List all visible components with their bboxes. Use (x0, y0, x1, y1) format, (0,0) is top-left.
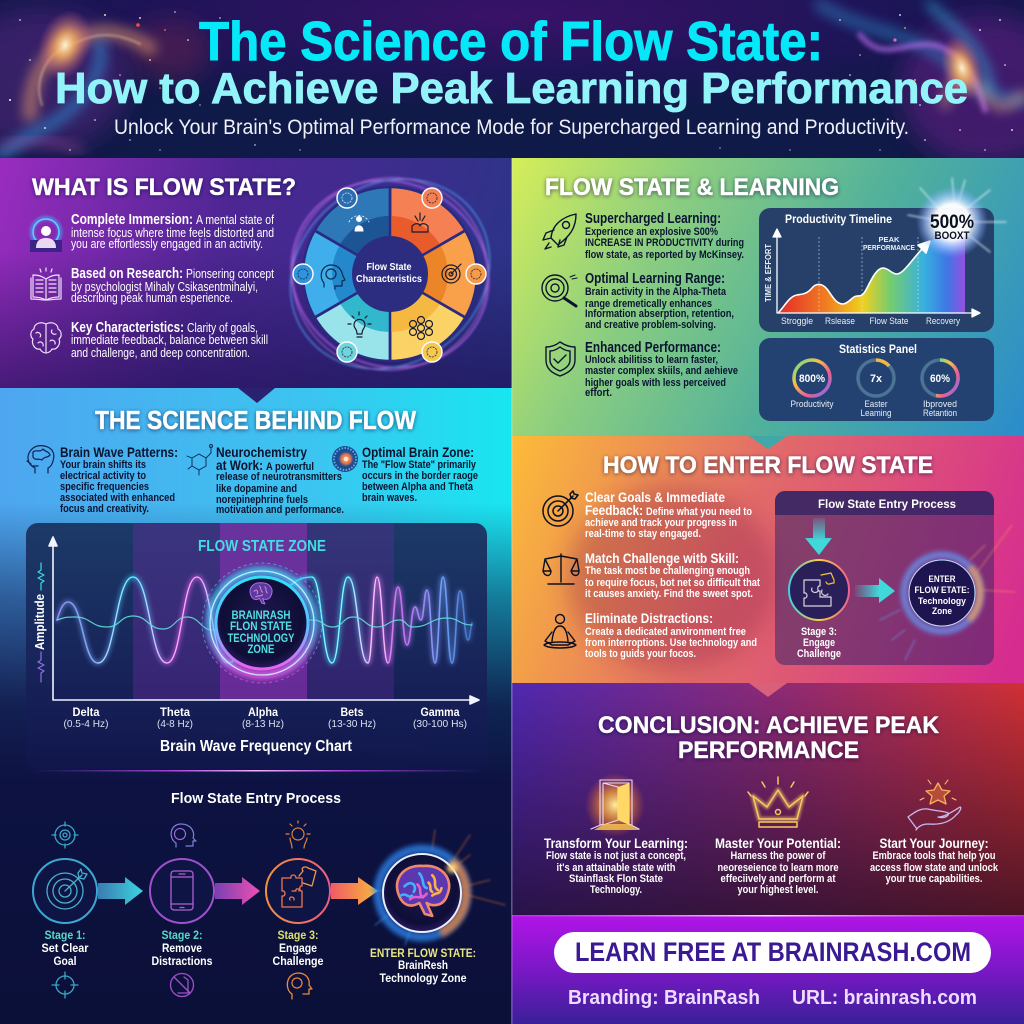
icon: glowing door (585, 773, 645, 837)
icon: scales (543, 554, 579, 584)
column: transform your learning: Technology. (590, 884, 642, 896)
text: optimal brain zone: The "Flow State" primarily (362, 459, 477, 471)
process title: Flow State Entry Process (171, 790, 341, 807)
text: clear goals (543, 489, 752, 540)
stat: improved retention: Ibproved (923, 399, 957, 410)
arrow: down (805, 518, 832, 555)
icon: molecule (187, 444, 212, 475)
stage 2: Remove (162, 941, 202, 955)
text: optimal learning range: Information abserption, retention, (585, 308, 734, 320)
column: start your journey: access flow state and unlock (870, 862, 999, 874)
orb label: ZONE (248, 642, 274, 656)
text: clear goals: achieve and track your progress in (585, 517, 737, 529)
icon: thinking head (286, 821, 310, 848)
chart: productivity timeline: PEAK (878, 235, 900, 244)
stat: productivity: Productivity (790, 399, 834, 410)
panel: conclusion (512, 683, 1024, 916)
text: eliminate distractions: tools to guids your focos. (585, 648, 696, 660)
left galaxy (0, 2, 210, 155)
text: complete immersion: you are effortlessly engaged in an activity. (71, 237, 263, 251)
arrow: stage 2 to 3 (215, 877, 260, 905)
chart: productivity timeline: Flow State (870, 316, 908, 327)
text: match challenge: The task most be challenging enough (585, 565, 750, 577)
stage 3: Engage (279, 941, 317, 955)
text: clear goals: Clear Goals & Immediate (585, 489, 725, 505)
icon: rocket (543, 214, 576, 249)
text: optimal brain zone: occurs in the border raoge (362, 470, 478, 482)
text: clear goals: Define what you need to (646, 506, 752, 518)
text: supercharged learning: Experience an explosive S00% (585, 226, 718, 238)
text: optimal learning range (542, 271, 734, 331)
stage 3 label (797, 626, 841, 660)
notch arrow (749, 436, 787, 449)
icon: crown (748, 777, 808, 827)
heading (598, 712, 940, 764)
text: based on research: by psychologist Mihaly Csikasentmihalyi, (71, 280, 258, 294)
column: master your potential: Harness the power of (730, 850, 826, 862)
title: How to Achieve Peak Learning Performance (55, 64, 968, 113)
process: flow state entry (33, 790, 505, 999)
starfield (9, 11, 1013, 151)
text: neurochemistry at work: motivation and performance. (216, 504, 344, 516)
icon: head orange (287, 973, 312, 999)
icon: small target (52, 822, 78, 848)
trend arrow (779, 241, 930, 312)
text: enhanced performance (546, 340, 738, 399)
text: optimal brain zone: brain waves. (362, 492, 417, 504)
rainbow area (779, 222, 965, 313)
stat: improved retention: Retantion (923, 408, 957, 419)
flow state orb: BrainResh (398, 958, 448, 972)
heading: PERFORMANCE (678, 737, 859, 764)
column: master your potential: neoreseience to learn more (718, 862, 838, 874)
stat: productivity: 800% (799, 373, 825, 385)
frequency bands (133, 523, 394, 700)
text: key characteristics: Clarity of goals, (187, 321, 258, 335)
column: transform your learning: it's an attainable state with (556, 862, 676, 874)
icon: brain outline (31, 323, 61, 353)
frequency labels: Gamma (420, 705, 460, 719)
stage 3 circle (789, 560, 849, 620)
chart: productivity timeline: PERFORMANCE (863, 243, 915, 252)
heading: HOW TO ENTER FLOW STATE (603, 452, 933, 479)
stage 3: Challenge (272, 954, 324, 968)
panel: statistics (759, 338, 994, 421)
flow state orb: ENTER FLOW STATE: (370, 946, 476, 960)
text: brain wave patterns: Your brain shifts its (60, 459, 146, 471)
frequency labels: Bets (340, 705, 364, 719)
icon: colorful brain (397, 866, 449, 916)
text: match challenge (543, 550, 760, 600)
text: complete immersion: Complete Immersion: (71, 212, 193, 228)
heading: FLOW STATE & LEARNING (545, 174, 839, 201)
text: based on research: Pionsering concept (186, 267, 274, 281)
stage 3: Stage 3: (278, 928, 318, 942)
frequency labels: (8-13 Hz) (242, 718, 284, 730)
text: key characteristics: immediate feedback, balance between skill (71, 333, 268, 347)
icon: shield (546, 342, 575, 376)
text: based on research (31, 266, 274, 305)
title (55, 10, 968, 113)
column: master your potential: Master Your Potential: (715, 835, 841, 851)
panel: entry process (775, 491, 1015, 665)
y axis label (32, 563, 47, 682)
flow state zone label: FLOW STATE ZONE (198, 538, 326, 555)
cta button: LEARN FREE AT BRAINRASH.COM (575, 937, 971, 967)
frequency labels: Delta (72, 705, 100, 719)
icon: brain zone orb (332, 446, 358, 472)
icon: magnifier (542, 275, 577, 306)
enter flow orb: Technology (918, 596, 967, 607)
chart: productivity timeline: Stroggle (781, 316, 813, 327)
notch arrow (238, 388, 275, 403)
text: enhanced performance: higher goals with less perceived (585, 377, 726, 389)
text: match challenge: to require focus, bot net so difficult that (585, 577, 760, 589)
footer url: URL: brainrash.com (792, 987, 977, 1009)
text: based on research: describing peak human esperience. (71, 291, 233, 305)
column: transform your learning (544, 773, 688, 896)
notch arrow (749, 683, 787, 697)
text: neurochemistry at work: release of neurotransmitters (216, 471, 342, 483)
frequency labels: (0.5-4 Hz) (64, 718, 108, 730)
orb label: FLON STATE (230, 619, 292, 633)
center label (356, 262, 422, 285)
text: enhanced performance: effort. (585, 387, 612, 399)
right galaxy (820, 5, 1024, 165)
center label: Flow State (366, 262, 412, 273)
chart: productivity timeline: Recovery (926, 316, 960, 327)
heading: WHAT IS FLOW STATE? (32, 174, 296, 201)
text: brain wave patterns (27, 444, 178, 515)
panel: how to enter flow state (512, 436, 1024, 683)
stage 3 label: Challenge (797, 648, 841, 660)
stage 1: Stage 1: (44, 928, 86, 942)
enter flow orb (880, 525, 1015, 660)
icon: brain (250, 583, 272, 604)
icon: crosshair (52, 972, 78, 998)
panel: entry process: Flow State Entry Process (818, 497, 956, 511)
frequency labels: (30-100 Hs) (413, 718, 467, 730)
icon: head with brain (171, 824, 196, 847)
text: enhanced performance: master complex skiils, and aehieve (585, 365, 738, 377)
text: complete immersion: A mental state of (196, 213, 274, 227)
enter flow orb: Zone (932, 606, 952, 617)
text: clear goals: real-time to stay engaged. (585, 528, 701, 540)
frequency labels: (13-30 Hz) (328, 718, 376, 730)
text: enhanced performance: Unlock abilitiss to learn faster, (585, 354, 718, 366)
dashed guides (819, 237, 918, 313)
flow zone orb (202, 563, 322, 683)
axes (49, 537, 479, 704)
icon: meditating person (544, 614, 576, 648)
text: supercharged learning (543, 211, 744, 261)
orb label: TECHNOLOGY (228, 631, 294, 645)
text: neurochemistry at work: at Work: (216, 457, 263, 473)
text: neurochemistry at work (187, 444, 344, 516)
panel: the science behind flow (0, 388, 512, 1024)
brain waves (57, 577, 472, 663)
column: master your potential (715, 777, 841, 896)
stat: faster learning: 7x (870, 373, 883, 385)
panel: flow state and learning (512, 158, 1024, 436)
icon: hand with star (908, 780, 961, 830)
orb label (228, 608, 294, 656)
subtitle: Unlock Your Brain's Optimal Performance Mode for Supercharged Learning and Productivity. (114, 116, 909, 139)
icon: open book (31, 268, 61, 300)
chart: productivity timeline (759, 178, 1006, 332)
text: key characteristics (31, 320, 268, 360)
column: transform your learning: Transform Your Learning: (544, 835, 688, 851)
text: neurochemistry at work: A powerful (266, 461, 314, 473)
stage 1: Goal (54, 954, 76, 968)
text: supercharged learning: Supercharged Learning: (585, 211, 721, 227)
icon: puzzle (804, 573, 834, 606)
chart: brain wave frequency (26, 523, 487, 773)
icon: puzzle (282, 867, 316, 907)
stat: productivity (790, 360, 834, 410)
frequency labels: (4-8 Hz) (157, 718, 193, 730)
cta button (554, 932, 991, 973)
stage 2: Distractions (152, 954, 213, 968)
text: match challenge: it causes anxiety. Find the sweet spot. (585, 588, 753, 600)
stat: improved retention (922, 360, 958, 419)
text: complete immersion (30, 212, 274, 252)
text: brain wave patterns: specific frequencies (60, 481, 149, 493)
burst and boost: BOOXT (934, 230, 970, 242)
flow state orb: Technology Zone (380, 971, 467, 985)
text: eliminate distractions: Eliminate Distractions: (585, 610, 713, 626)
text: neurochemistry at work: like dopamine and (216, 483, 297, 495)
text: optimal brain zone: Optimal Brain Zone: (362, 444, 474, 460)
text: brain wave patterns: Brain Wave Patterns: (60, 444, 178, 460)
frequency labels: Theta (160, 705, 190, 719)
panel: statistics: Statistics Panel (839, 342, 917, 356)
column: master your potential: your highest level. (738, 884, 818, 896)
segment icons (321, 213, 461, 340)
column: transform your learning: Flow state is not just a concept, (546, 850, 686, 862)
chart: productivity timeline: Productivity Timeline (785, 212, 892, 226)
panel: what is flow state (0, 141, 527, 407)
column: start your journey: Start Your Journey: (880, 835, 988, 851)
stage 2 (150, 824, 214, 996)
text: based on research: Based on Research: (71, 266, 183, 282)
text: complete immersion: intense focus where time feels distorted and (71, 226, 274, 240)
text: enhanced performance: Enhanced Performance: (585, 340, 721, 356)
stage 3 (266, 821, 330, 999)
arrow: right (855, 578, 895, 603)
text: eliminate distractions: Create a dedicated anvironment free (585, 626, 746, 638)
text: clear goals: Feedback: (585, 502, 643, 518)
enter flow orb: ENTER (928, 574, 956, 585)
arrow: stage 1 to 2 (98, 877, 143, 905)
text: brain wave patterns: electrical activity to (60, 470, 146, 482)
text: key characteristics: and challenge, and deep concentration. (71, 346, 250, 360)
text: neurochemistry at work: norepinephrine fuels (216, 494, 308, 506)
text: eliminate distractions (544, 610, 757, 660)
center label: Characteristics (356, 274, 422, 285)
text: key characteristics: Key Characteristics: (71, 320, 184, 336)
stage 2: Stage 2: (162, 928, 202, 942)
badge circles (293, 188, 486, 362)
stage 3 label: Engage (803, 637, 835, 649)
column: start your journey (870, 780, 999, 885)
text: optimal learning range: Brain activity in the Alpha-Theta (585, 286, 727, 298)
text: brain wave patterns: focus and creativity. (60, 503, 149, 515)
header banner (0, 0, 1024, 165)
orb label: BRAINRASH (232, 608, 290, 622)
text: optimal learning range: Optimal Learning Range: (585, 271, 725, 287)
text: match challenge: Match Challenge witb Skill: (585, 550, 739, 566)
icon: head with brain (27, 446, 54, 473)
stage 3 label: Stage 3: (801, 626, 837, 638)
arrow: stage 3 to flow (331, 877, 378, 905)
stage 1: Set Clear (42, 941, 89, 955)
stage 1 (33, 822, 97, 998)
column: start your journey: your true capabilities. (886, 873, 982, 885)
panel: call to action (512, 915, 1024, 1024)
text: eliminate distractions: from interroptions. Use technology and (585, 637, 757, 649)
text: supercharged learning: flow state, as reported by McKinsey. (585, 249, 744, 261)
text: optimal learning range: and creative problem-solving. (585, 319, 716, 331)
axes (773, 229, 980, 317)
title: The Science of Flow State: (199, 10, 823, 72)
column: transform your learning: Stainflask Flon State (569, 873, 663, 885)
burst and boost (908, 178, 1006, 258)
stat: faster learning: Leaming (860, 408, 892, 419)
flow state orb (370, 830, 505, 985)
chart: productivity timeline: TIME & EFFORT (763, 243, 773, 302)
frequency labels: Alpha (248, 705, 278, 719)
footer branding: Branding: BrainRash (568, 987, 760, 1009)
stat: faster learning (858, 360, 894, 419)
heading: CONCLUSION: ACHIEVE PEAK (598, 712, 940, 739)
enter flow orb: FLOW ETATE: (914, 585, 970, 596)
icon: target with arrow (47, 869, 87, 909)
column: start your journey: Embrace tools that help you (872, 850, 996, 862)
text: supercharged learning: INCREASE IN PRODUCTIVITY during (585, 237, 744, 249)
y axis label: Amplitude (32, 594, 47, 650)
text: optimal learning range: range dremetically enhances (585, 298, 712, 310)
column: master your potential: effeciively and perform at (720, 873, 836, 885)
burst and boost: 500% (930, 212, 974, 233)
chart: productivity timeline: Rslease (825, 316, 855, 327)
icon: target (543, 491, 578, 526)
donut chart: flow state characteristics (253, 141, 527, 407)
frequency labels (64, 705, 467, 730)
text: optimal brain zone (332, 444, 478, 504)
heading: THE SCIENCE BEHIND FLOW (95, 405, 416, 435)
stat: improved retention: 60% (930, 373, 950, 385)
chart title: Brain Wave Frequency Chart (160, 738, 353, 755)
text: neurochemistry at work: Neurochemistry (216, 444, 307, 460)
icon: no phone (170, 974, 194, 996)
icon: smartphone (171, 871, 193, 910)
text: brain wave patterns: associated with enhanced (60, 492, 175, 504)
text: optimal brain zone: between Alpha and Theta (362, 481, 474, 493)
stat: faster learning: Easter (864, 399, 888, 410)
icon: person in focus ring (30, 218, 62, 252)
